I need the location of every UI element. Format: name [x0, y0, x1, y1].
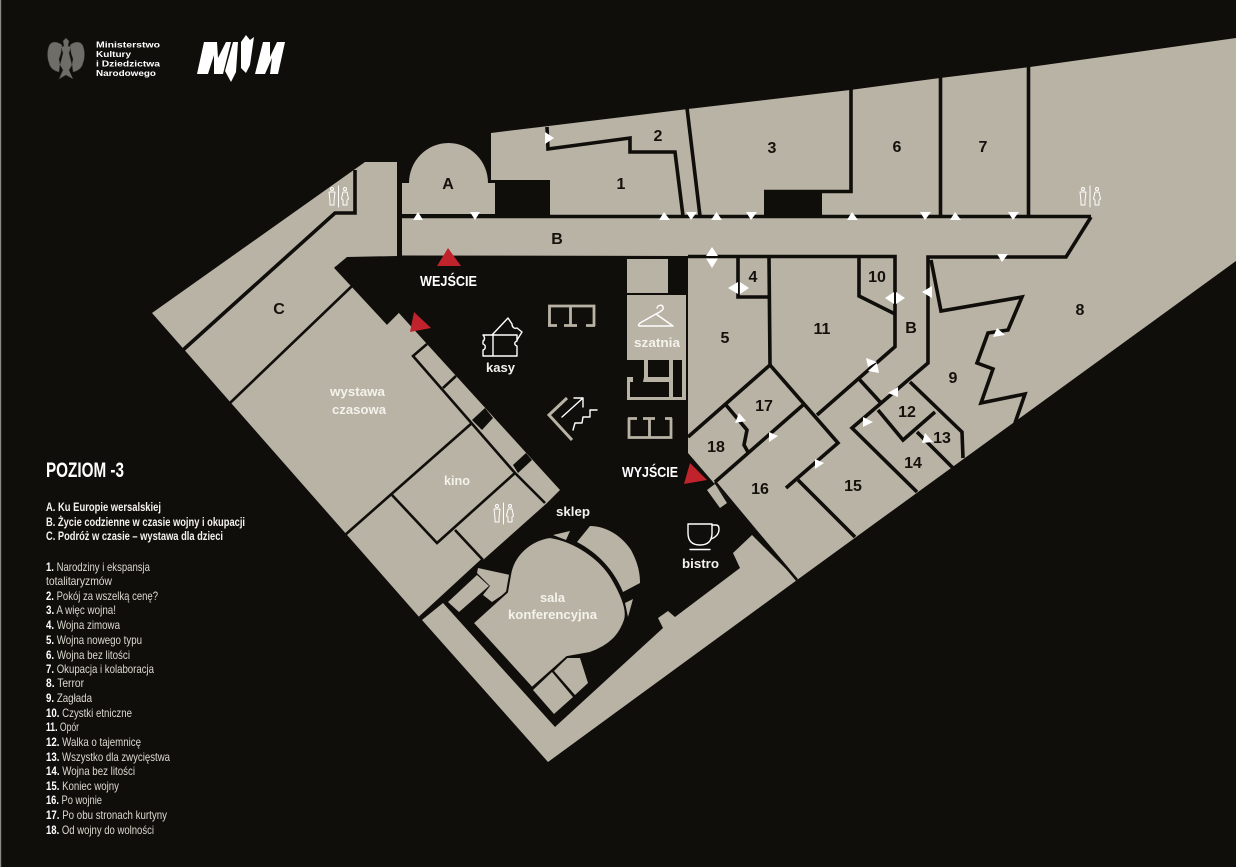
heading: level: POZIOM -3 [46, 459, 124, 482]
legend: numbered rooms: 8. Terror [46, 676, 84, 690]
icon: toilets cinema [494, 503, 514, 524]
place labels: sala [540, 590, 566, 605]
room labels: 5 [721, 330, 730, 347]
small rooms around conference hall [448, 531, 633, 714]
stair block cut-outs [627, 360, 682, 397]
room labels: 6 [893, 139, 902, 156]
MIN museum logo [197, 35, 285, 82]
legend: numbered rooms: 6. Wojna bez litości [46, 648, 130, 662]
icon: toilets west [329, 186, 348, 207]
ministry logo: i Dziedzictwa [96, 58, 160, 68]
legend: exhibitions A B C [46, 500, 245, 543]
north wing: rooms 1 2 3 6 7 [491, 38, 1236, 218]
room labels: 17 [755, 398, 773, 415]
west block: C, temporary exhibition, cinema [152, 162, 560, 618]
icon: toilets east [1080, 186, 1100, 207]
room labels: 9 [949, 370, 958, 387]
legend: numbered rooms: 12. Walka o tajemnicę [46, 735, 141, 749]
walls [183, 64, 1091, 618]
place labels: wystawa [329, 384, 386, 399]
legend: numbered rooms: 11. Opór [46, 720, 79, 734]
direction arrows [413, 132, 1019, 469]
place labels: WEJŚCIE [420, 272, 477, 290]
room labels: B [551, 231, 563, 248]
legend: numbered rooms [46, 560, 170, 837]
legend: exhibitions A B C: B. Życie codzienne w czasie wojny i okupacji [46, 514, 245, 529]
legend [46, 459, 245, 837]
ministry logo: Narodowego [96, 68, 156, 78]
room labels: 11 [814, 321, 831, 338]
ministry logo [48, 38, 160, 79]
icon: escalator [549, 398, 597, 440]
room labels: 2 [654, 128, 663, 145]
icon: tickets [483, 318, 522, 356]
place labels: sklep [556, 504, 590, 519]
room labels: 14 [904, 455, 922, 472]
legend: numbered rooms: 17. Po obu stronach kurtyny [46, 808, 167, 822]
icon: stairs south [628, 418, 672, 438]
room labels: 16 [751, 481, 769, 498]
legend: numbered rooms: 15. Koniec wojny [46, 779, 119, 793]
legend: numbered rooms: totalitaryzmów [46, 574, 112, 588]
icon: polish eagle [48, 38, 84, 79]
room labels: 12 [898, 404, 916, 421]
legend: exhibitions A B C: C. Podróż w czasie – wystawa dla dzieci [46, 529, 223, 543]
room labels: 8 [1076, 302, 1085, 319]
corridor B and east galleries [402, 216, 1236, 580]
legend: numbered rooms: 10. Czystki etniczne [46, 706, 132, 720]
icon: stairs north [548, 306, 595, 326]
legend: numbered rooms: 14. Wojna bez litości [46, 764, 135, 778]
room labels: C [273, 301, 285, 318]
place labels: WYJŚCIE [622, 463, 678, 481]
legend: exhibitions A B C: A. Ku Europie wersalskiej [46, 500, 161, 514]
room labels: 18 [707, 439, 725, 456]
place labels: szatnia [634, 335, 681, 350]
legend: numbered rooms: 7. Okupacja i kolaboracja [46, 662, 154, 676]
ministry logo: Ministerstwo [96, 40, 160, 50]
place labels [329, 272, 719, 622]
legend: numbered rooms: 9. Zagłada [46, 691, 92, 705]
legend: numbered rooms: 4. Wojna zimowa [46, 618, 120, 632]
legend: numbered rooms: 18. Od wojny do wolności [46, 823, 154, 837]
legend: numbered rooms: 1. Narodziny i ekspansja [46, 560, 150, 574]
room labels: A [442, 176, 454, 193]
room labels: 1 [617, 176, 626, 193]
room A [402, 143, 495, 214]
room labels: 13 [933, 430, 951, 447]
wardrobe block and store rooms [627, 259, 686, 400]
entrance and exit markers [410, 248, 707, 484]
room labels: 15 [844, 478, 862, 495]
place labels: czasowa [332, 402, 387, 417]
place labels: kasy [486, 360, 516, 375]
place labels: bistro [682, 556, 719, 571]
legend: numbered rooms: 5. Wojna nowego typu [46, 633, 142, 647]
legend: numbered rooms: 2. Pokój za wszelką cenę? [46, 589, 158, 603]
place labels: kino [444, 473, 470, 488]
room labels [273, 128, 1085, 498]
room labels: 4 [749, 269, 758, 286]
floor plan [152, 38, 1236, 762]
icon: coffee cup [688, 524, 719, 550]
place labels: konferencyjna [508, 607, 598, 622]
legend: numbered rooms: 13. Wszystko dla zwycięstwa [46, 750, 170, 764]
room labels: 10 [868, 269, 886, 286]
room labels: B [905, 320, 917, 337]
shop lobe [577, 526, 640, 592]
ministry logo: Kultury [96, 49, 131, 59]
south strip [422, 535, 797, 762]
room labels: 7 [979, 139, 988, 156]
legend: numbered rooms: 16. Po wojnie [46, 793, 102, 807]
conference hall [473, 537, 626, 688]
legend: numbered rooms: 3. A więc wojna! [46, 603, 116, 617]
room labels: 3 [768, 140, 777, 157]
icon: coat hanger [638, 305, 673, 326]
